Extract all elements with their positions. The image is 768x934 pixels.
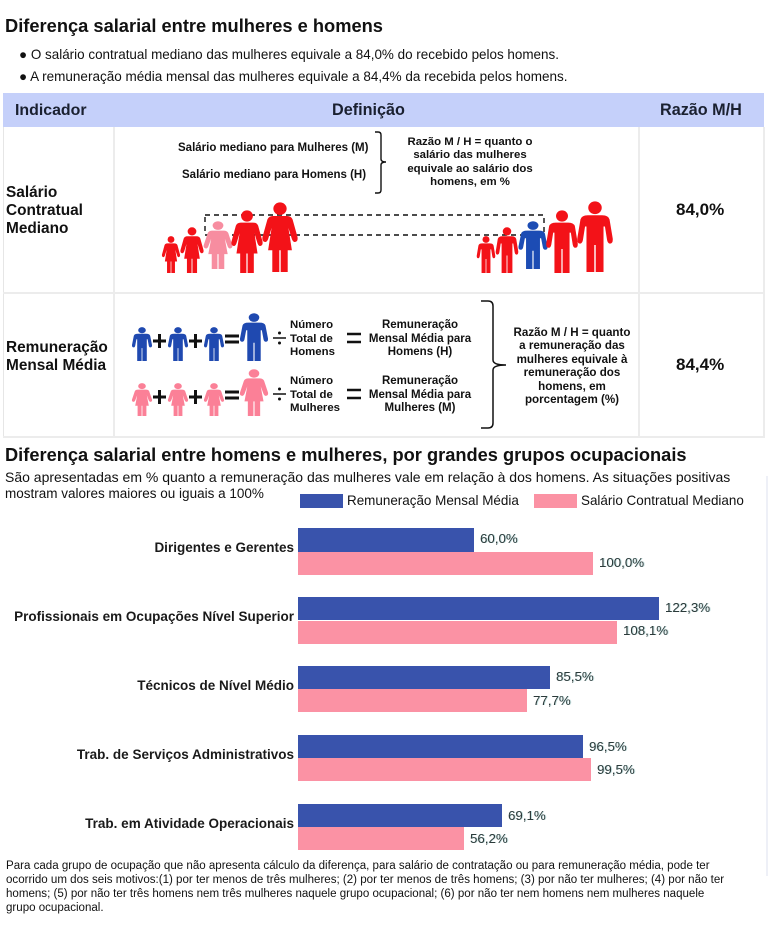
text: mean pay men: [369, 319, 472, 358]
text: mean pay women: Mulheres (M): [385, 402, 455, 414]
text: total women: [290, 375, 340, 414]
value: 84,0%: 84,0%: [676, 200, 724, 219]
text: total men: Total de: [290, 332, 333, 344]
group: Serviços Administrativos: 99,5%: [597, 762, 635, 777]
text: total women: Mulheres: [290, 402, 340, 414]
men equation icons: [132, 313, 268, 361]
label: median salary women: Salário mediano para Mulheres (M): [178, 142, 368, 154]
group: Técnicos: Técnicos de Nível Médio: [137, 678, 294, 693]
row label: Salário Contratual Mediano: Mediano: [6, 220, 68, 237]
footnote: grupo ocupacional.: [6, 902, 104, 914]
group: Técnicos: [137, 666, 594, 712]
table header background: [3, 93, 764, 127]
text: mean pay men: Homens (H): [388, 346, 452, 358]
header: Definição: Definição: [332, 101, 405, 119]
text: mean pay men: Remuneração: [382, 319, 458, 331]
group: Serviços Administrativos: 96,5%: [589, 739, 627, 754]
definition: ratio row 1: Razão M / H = quanto o: [408, 136, 532, 148]
header: Indicador: Indicador: [15, 102, 87, 119]
bar chart: [14, 528, 711, 850]
group: Atividade Operacionais: [85, 804, 546, 850]
text: mean pay women: Remuneração: [382, 375, 458, 387]
group: Técnicos: 85,5%: [556, 669, 594, 684]
footnote: homens; (5) por não ter três homens nem três mulheres naquele grupo ocupacional; (6) por não ter nem homens nem mulheres naquele: [6, 888, 704, 900]
group: Profissionais: Profissionais em Ocupações Nível Superior: [14, 609, 294, 624]
group: Atividade Operacionais: 69,1%: [508, 808, 546, 823]
text: mean pay women: [369, 375, 472, 414]
bracket row 2: [481, 301, 506, 428]
definition: ratio row 2: homens, em: [538, 380, 606, 393]
bullet: mean monthly pay: ● A remuneração média mensal das mulheres equivale a 84,4% da recebida pelos homens.: [19, 69, 567, 84]
header: Razão M/H: Razão M/H: [660, 101, 742, 119]
legend swatch: blue: [300, 494, 343, 508]
legend: [300, 493, 744, 508]
group: Dirigentes e Gerentes: 60,0%: [480, 531, 518, 546]
legend label: pink: Salário Contratual Mediano: [581, 493, 744, 508]
text: total women: Total de: [290, 388, 333, 400]
text: total men: [290, 319, 335, 358]
footnote: ocorrido um dos seis motivos:(1) por ter menos de três mulheres; (2) por ter menos de três homens; (3) por não ter mulheres; (4) por não ter: [6, 874, 724, 886]
row label: Remuneração Mensal Média: [6, 339, 108, 374]
text: mean pay women: Mensal Média para: [369, 388, 471, 400]
label: median salary men: Salário mediano para Homens (H): [182, 169, 366, 181]
text: mean pay men: Mensal Média para: [369, 332, 471, 344]
bracket row 1: [375, 132, 386, 193]
definition: ratio row 1: homens, em %: [430, 176, 510, 188]
value: 84,4%: 84,4%: [676, 355, 724, 374]
text: total men: Homens: [290, 346, 335, 358]
group: Dirigentes e Gerentes: [154, 528, 645, 575]
group: Profissionais: 108,1%: [623, 623, 668, 638]
group: Serviços Administrativos: Trab. de Serviços Administrativos: [77, 747, 294, 762]
chart description: São apresentadas em % quanto a remuneração das mulheres vale em relação à dos homens. As situações positivas: [5, 469, 730, 485]
row label: Remuneração Mensal Média: Mensal Média: [6, 357, 106, 374]
men row: [477, 201, 613, 273]
bullet: median contract salary: ● O salário contratual mediano das mulheres equivale a 84,0% do recebido pelos homens.: [19, 47, 559, 62]
group: Serviços Administrativos: [77, 735, 636, 781]
definition: ratio row 2: [514, 326, 630, 406]
chart description: mostram valores maiores ou iguais a 100%: [5, 486, 264, 500]
group: Atividade Operacionais: 56,2%: [470, 831, 508, 846]
group: Profissionais: [14, 597, 711, 644]
chart description: [5, 469, 730, 501]
legend swatch: pink: [534, 494, 577, 508]
footnote: Para cada grupo de ocupação que não apresenta cálculo da diferença, para salário de contratação ou para remuneração média, pode ter: [6, 860, 710, 872]
dashed comparison box: [205, 215, 544, 235]
legend label: blue: Remuneração Mensal Média: [347, 493, 519, 508]
row label: Remuneração Mensal Média: Remuneração: [6, 339, 108, 356]
row label: Salário Contratual Mediano: Contratual: [6, 202, 83, 219]
definition: ratio row 2: Razão M / H = quanto: [514, 326, 630, 339]
group: Atividade Operacionais: Trab. em Atividade Operacionais: [85, 816, 294, 831]
group: Técnicos: 77,7%: [533, 693, 571, 708]
definition: ratio row 1: salário das mulheres: [413, 149, 527, 161]
definition: ratio row 1: equivale ao salário dos: [407, 163, 533, 175]
text: total men: Número: [290, 319, 333, 331]
definition: ratio row 2: mulheres equivale à: [517, 353, 627, 366]
title: salary gap: Diferença salarial entre mulheres e homens: [5, 15, 383, 36]
text: total women: Número: [290, 375, 333, 387]
definition: ratio row 1: [407, 136, 533, 188]
right edge strip: [766, 476, 768, 876]
footnote: [6, 860, 724, 914]
women equation icons: [132, 369, 268, 416]
row label: Salário Contratual Mediano: Salário: [6, 184, 57, 201]
group: Profissionais: 122,3%: [665, 600, 710, 615]
equation operators: [153, 334, 361, 404]
heading: occupational groups: Diferença salarial entre homens e mulheres, por grandes grupos ocupacionais: [5, 444, 687, 465]
women row: [162, 202, 298, 273]
row label: Salário Contratual Mediano: [6, 184, 83, 237]
definition: ratio row 2: porcentagem (%): [525, 393, 619, 406]
group: Dirigentes e Gerentes: Dirigentes e Gerentes: [154, 540, 294, 555]
definition: ratio row 2: a remuneração das: [519, 339, 625, 352]
table panel: [3, 93, 765, 438]
group: Dirigentes e Gerentes: 100,0%: [599, 555, 644, 570]
definition: ratio row 2: remuneração dos: [524, 366, 620, 379]
